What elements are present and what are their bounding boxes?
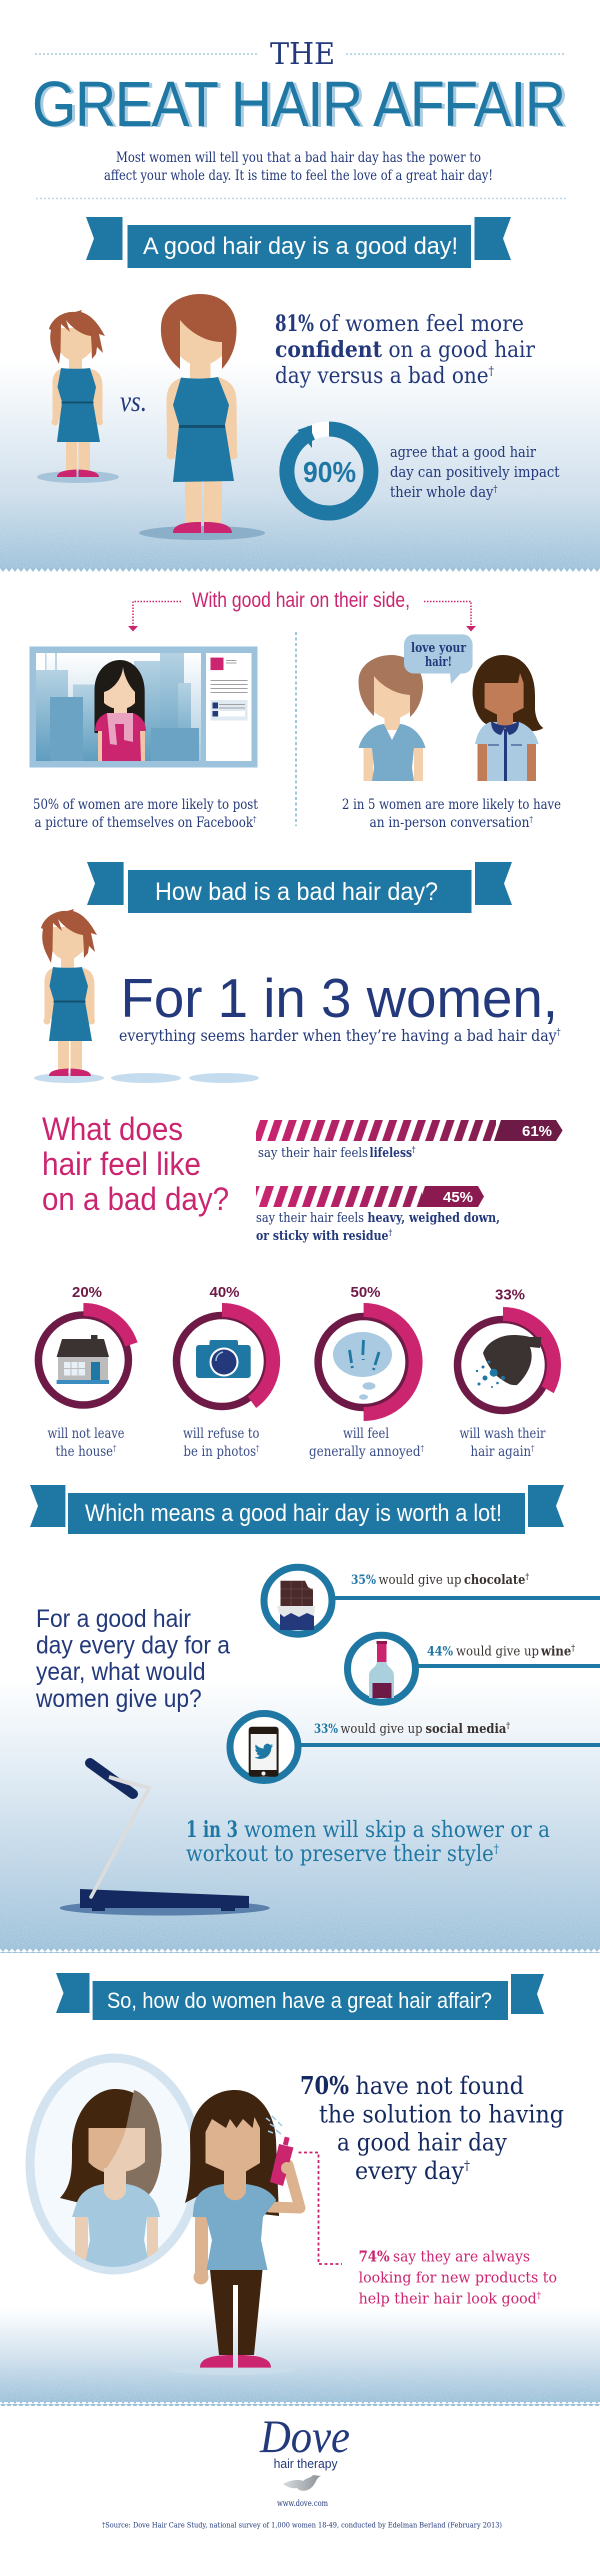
arrow: right dotted [424,602,476,632]
caption: lifeless: lifeless [370,1146,421,1161]
label: 33% social media: 33% [314,1722,339,1737]
label: 44% wine: 44% [427,1645,454,1660]
item: chocolate [264,1567,600,1634]
stat text: 90% agree [390,445,560,501]
caption: 2 in 5 women: 2 in 5 women are more likely to have [342,797,561,813]
stat: 74% new products: † [537,2292,541,2302]
bar: 61% lifeless [256,1120,563,1141]
bar: 61% lifeless: 61% [522,1123,552,1140]
caption: will wash their hair again: will wash their [460,1426,546,1442]
caption: will not leave the house: will not leave [48,1426,125,1442]
stat: 70% have not found: every day [355,2157,473,2185]
stat: 70% have not found: the solution to having [319,2101,564,2129]
caption: will feel generally annoyed [309,1426,424,1460]
stat: 81% confident: confident [275,337,383,363]
caption: heavy weighed down: or sticky with residue [256,1229,414,1244]
stat: 74% new products [359,2248,557,2308]
stat: 70% have not found: a good hair day [337,2129,507,2157]
caption: 50% Facebook: a picture of themselves on Facebook [34,815,285,831]
stat text: 90% agree: † [493,485,498,495]
label: 33% social media: social media [426,1722,517,1737]
source footnote: †Source: Dove Hair Care Study, national survey of 1,000 women 18-49, conducted by Edelman Berland (February 2013) [102,2520,502,2530]
section 4 background [0,1677,600,1949]
icon: wine bottle [369,1641,394,1698]
ring chart: 50% generally annoyed [318,1284,416,1414]
caption: will not leave the house: † [113,1444,116,1453]
stat: 70% have not found: have not found [356,2072,524,2100]
stat: 1 in 3 skip a shower: women will skip a shower or a [244,1818,550,1843]
label: 44% wine [427,1643,575,1660]
label: 35% chocolate [351,1571,529,1588]
caption: will refuse to be in photos: will refuse to [183,1426,260,1442]
stat: 74% new products: help their hair look good [359,2290,547,2308]
caption: will refuse to be in photos: † [256,1444,260,1453]
website url: www.dove.com [277,2499,328,2508]
caption: will not leave the house [48,1426,125,1460]
ring chart: 33% wash hair again: 33% [495,1286,525,1304]
icon: chocolate bar [277,1581,315,1630]
logo: Dove hair therapy [259,2411,350,2491]
caption: will refuse to be in photos: be in photos [184,1444,268,1460]
illustration: bad hair woman [37,310,119,483]
caption: 50% Facebook: † [253,815,256,824]
heading: What does hair feel like: hair feel like [42,1146,201,1182]
intro paragraph [104,150,493,184]
speech bubble: love your hair: hair! [425,655,452,670]
question: what would women give up [35,1605,230,1713]
caption: heavy weighed down: heavy, weighed down, [368,1211,500,1226]
item: wine [348,1635,600,1702]
caption: will refuse to be in photos [183,1426,260,1460]
illustration: woman with long hair [473,655,544,781]
caption: heavy weighed down: † [388,1227,392,1237]
label: 35% chocolate: † [525,1571,529,1581]
illustration: good hair woman [139,294,265,540]
icon: house [57,1335,109,1384]
label: 44% wine: wine [541,1645,575,1660]
ring chart: 50% generally annoyed: 50% [350,1284,380,1301]
stat text: 90% agree: agree that a good hair [390,445,536,461]
item: social media [230,1714,600,1780]
stat: 81% confident: day versus a bad one [275,364,510,389]
arrow: left dotted [128,602,181,632]
caption: will feel generally annoyed: will feel [343,1426,389,1442]
ring chart: 20% will not leave the house [38,1284,131,1405]
banner: How bad is a bad hair day?: How bad is a bad hair day? [155,878,438,906]
ring chart: 20% will not leave the house: 20% [72,1284,102,1301]
caption: will wash their hair again: hair again [470,1444,540,1460]
vs. label: vs. [120,385,147,418]
label: 35% chocolate: chocolate [464,1573,534,1588]
question: what would women give up: For a good hair [36,1605,191,1633]
icon: camera [196,1340,251,1378]
caption: will wash their hair again: † [531,1444,534,1453]
section 1 background [0,360,600,568]
stat: 1 in 3 skip a shower: 1 in 3 [186,1817,238,1843]
label: 35% chocolate: would give up [378,1573,462,1588]
stat: 70% have not found: † [464,2159,470,2174]
bar: 45% heavy: 45% [443,1189,473,1206]
caption: 50% Facebook: 50% of women are more likely to post [33,797,258,813]
stat: 81% confident [275,311,535,389]
stat: 74% new products: 74% [359,2248,390,2266]
bar: 45% heavy [256,1186,484,1207]
label: 33% social media [314,1720,510,1737]
heading: What does hair feel like: What does [42,1111,183,1147]
section 5 background [0,2308,600,2402]
stat: 81% confident: 81% [275,311,314,337]
intro paragraph: Most women will tell you that a bad hair day has the power to [116,150,481,166]
caption: will feel generally annoyed: † [420,1444,424,1453]
illustration: treadmill [60,1763,270,1916]
icon: shower head [476,1335,542,1388]
speech bubble: love your hair [404,634,473,684]
banner: A good hair day is a good day!: A good hair day is a good day! [143,233,458,260]
stat text: 90% agree: day can positively impact [390,465,560,481]
stat: 81% confident: † [489,364,494,378]
caption: heavy weighed down: say their hair feels [256,1211,364,1226]
icon: phone with bird [249,1727,279,1777]
heading: What does hair feel like: on a bad day? [42,1181,229,1217]
illustration: woman spraying hair [166,2090,300,2375]
question: what would women give up: women give up? [35,1685,202,1713]
illustration: mirror with reflection [30,2058,198,2270]
donut chart: 90%: 90% [303,457,356,489]
caption: will feel generally annoyed: generally annoyed [309,1444,435,1460]
question: what would women give up: day every day for a [36,1632,230,1660]
caption: 2 in 5 women [342,797,561,831]
icon: thought bubble [333,1332,392,1400]
banner: A good hair day is a good day! [86,217,511,268]
logo: Dove hair therapy: Dove [259,2411,350,2463]
caption: 2 in 5 women: an in-person conversation [370,815,547,831]
text: everything seems harder: † [557,1028,561,1038]
caption: 2 in 5 women: † [529,815,533,824]
icon: dove bird [283,2475,321,2491]
stat: 81% confident: of women feel more [319,312,524,337]
stat: For 1 in 3 women: For 1 in 3 women, [120,967,558,1029]
caption: will not leave the house: the house [56,1444,122,1460]
logo: Dove hair therapy: hair therapy [274,2456,338,2471]
label: 44% wine: † [571,1643,575,1653]
stat: 81% confident: on a good hair [388,338,535,363]
ring chart: 33% wash hair again [458,1286,554,1410]
ring chart: 40% will refuse photos [176,1284,273,1406]
label: 33% social media: † [506,1720,510,1730]
caption: will wash their hair again [460,1426,546,1460]
banner: Which means a good hair day is worth a lot! [30,1485,564,1534]
heading: What does hair feel like [42,1111,229,1217]
ring chart: 40% will refuse photos: 40% [210,1284,240,1301]
banner: So, how do women have a great hair affair? [56,1973,544,2020]
caption: lifeless: say their hair feels [258,1146,368,1161]
stat: 1 in 3 skip a shower: workout to preserve their style [186,1842,532,1867]
banner: Which means a good hair day is worth a lot!: Which means a good hair day is worth a lot! [85,1500,502,1527]
stat: 74% new products: say they are always [393,2248,530,2266]
stat: 74% new products: looking for new products to [359,2269,557,2287]
speech bubble: love your hair: love your [411,641,466,656]
caption: 50% Facebook [33,797,258,831]
title: THE: THE [270,37,335,72]
illustration: bad hair woman with shadows [34,909,259,1083]
donut chart: 90% [287,425,371,513]
heading: With good hair on their side: With good hair on their side, [192,589,410,612]
text: everything seems harder: everything seems harder when they’re having a bad hair day [119,1026,600,1045]
stat: 1 in 3 skip a shower: † [494,1842,499,1856]
label: 35% chocolate: 35% [351,1573,377,1588]
intro paragraph: affect your whole day. It is time to feel the love of a great hair day! [104,168,493,184]
label: 33% social media: would give up [340,1722,422,1737]
question: what would women give up: year, what would [36,1658,206,1686]
stat: 1 in 3 skip a shower [186,1817,550,1867]
caption: lifeless: † [412,1144,416,1154]
stat: 70% have not found: 70% [300,2071,349,2100]
label: 44% wine: would give up [456,1645,539,1660]
title: GREAT HAIR AFFAIR: GREAT HAIR AFFAIR [35,69,569,141]
banner: So, how do women have a great hair affair?: So, how do women have a great hair affair? [107,1988,492,2013]
banner: How bad is a bad hair day? [87,862,512,913]
illustration: woman with short hair [359,655,426,781]
stat: 70% have not found [300,2071,564,2185]
title block [32,37,569,198]
caption: heavy weighed down [256,1211,500,1244]
caption: lifeless [258,1144,416,1161]
title: GREAT HAIR AFFAIR: GREAT HAIR AFFAIR [32,68,566,140]
illustration: Facebook page [30,646,258,768]
stat text: 90% agree: their whole day [390,485,504,501]
